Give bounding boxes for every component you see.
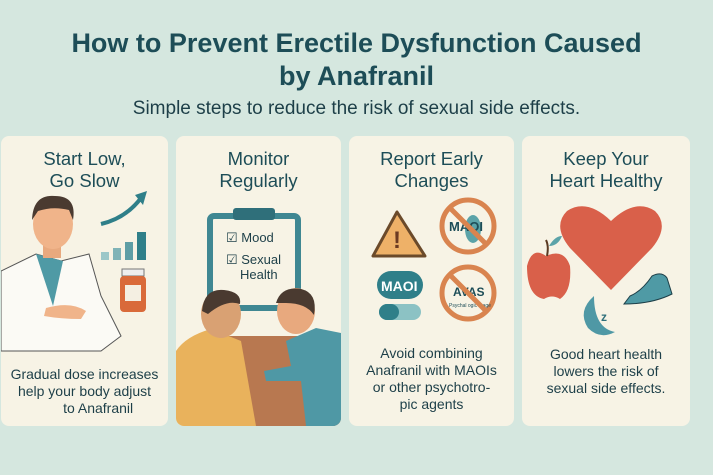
description: help your body adjust	[18, 383, 151, 399]
illustration: heart, apple, shoe, moon	[527, 206, 673, 336]
description: Gradual dose increases	[11, 366, 158, 382]
heading: Go Slow	[50, 170, 119, 191]
illustration: clipboard and people: ☑ Sexual	[226, 252, 281, 267]
title: by Anafranil	[279, 61, 434, 91]
description: Good heart health	[550, 346, 662, 362]
heading: Monitor	[228, 148, 289, 169]
heading	[380, 148, 483, 191]
panel: monitor	[176, 136, 341, 426]
illustration: clipboard and people: ☑ Mood	[226, 230, 274, 245]
illustration: warning and no-MAOI icons: AVAS	[453, 285, 485, 299]
title: How to Prevent Erectile Dysfunction Caused	[71, 28, 642, 58]
panel: start low	[1, 136, 168, 426]
illustration: warning and no-MAOI icons: !	[393, 227, 401, 254]
heading: Report Early	[380, 148, 483, 169]
description	[366, 345, 497, 412]
heading	[219, 148, 298, 191]
description: Avoid combining	[380, 345, 483, 361]
description	[11, 366, 158, 416]
illustration: heart, apple, shoe, moon: z	[601, 310, 607, 324]
title	[71, 28, 642, 91]
heading: Regularly	[219, 170, 298, 191]
illustration: warning and no-MAOI icons: MAOI	[381, 278, 418, 294]
heading: Start Low,	[43, 148, 126, 169]
description: pic agents	[400, 396, 463, 412]
illustration: warning and no-MAOI icons: Psychal ogic mage	[449, 303, 491, 309]
description: lowers the risk of	[553, 363, 659, 379]
description: Anafranil with MAOIs	[366, 362, 497, 378]
illustration: warning and no-MAOI icons	[371, 198, 496, 322]
illustration: clipboard and people: Health	[240, 267, 278, 282]
description: to Anafranil	[63, 400, 133, 416]
description	[547, 346, 665, 396]
heading	[43, 148, 126, 191]
panel: heart	[522, 136, 690, 426]
heading: Changes	[394, 170, 469, 191]
description: or other psychotro-	[373, 379, 490, 395]
description: sexual side effects.	[547, 380, 665, 396]
illustration: doctor	[1, 191, 147, 352]
heading: Heart Healthy	[549, 170, 663, 191]
illustration: clipboard and people	[176, 208, 341, 426]
subtitle: Simple steps to reduce the risk of sexual side effects.	[133, 98, 580, 119]
heading: Keep Your	[563, 148, 649, 169]
panel: report	[349, 136, 514, 426]
heading	[549, 148, 663, 191]
illustration: warning and no-MAOI icons: MAOI	[449, 219, 483, 234]
